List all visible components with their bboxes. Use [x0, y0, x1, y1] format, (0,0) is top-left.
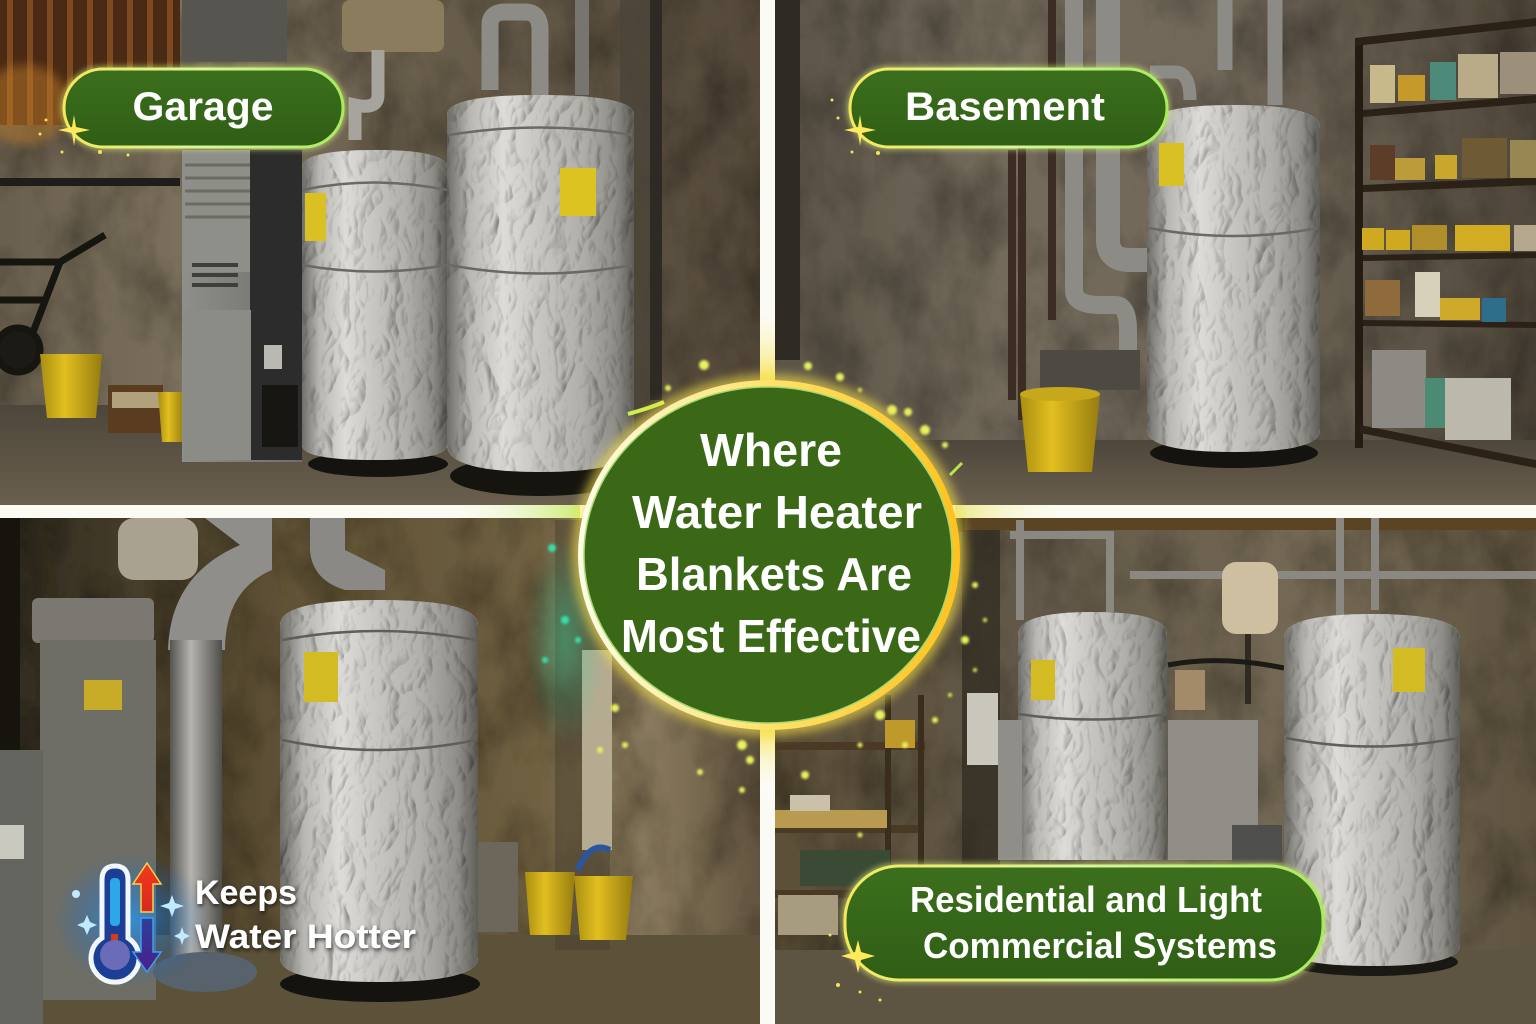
stroller [0, 235, 105, 372]
badge title: Most Effective [621, 610, 921, 662]
callout: keeps water hotter [52, 852, 416, 988]
label: Basement [830, 66, 1170, 155]
panel: commercial room photo [775, 518, 1536, 1024]
foil water heater [1147, 105, 1320, 468]
sparkles [72, 890, 190, 945]
badge title: Where [700, 424, 842, 476]
label: Residential and Light Commercial Systems: Residential and Light [910, 879, 1262, 920]
commercial room floor [775, 950, 1536, 1024]
badge disc [584, 387, 952, 723]
utility room floor [0, 935, 760, 1024]
basement wall [775, 0, 1536, 450]
gray box [478, 842, 518, 932]
label: Residential and Light Commercial Systems [828, 863, 1326, 1002]
large foil water heater [447, 95, 634, 496]
small foil water heater [302, 150, 448, 477]
garage floor [0, 405, 648, 505]
expansion tank [1222, 562, 1278, 704]
right foil water heater [1284, 614, 1460, 976]
silver pipes [1074, 0, 1275, 372]
keeps water hotter text [195, 874, 416, 956]
yellow buckets [525, 848, 633, 940]
furnace unit [182, 150, 302, 462]
storage shelf [1355, 18, 1536, 468]
wall control box [967, 693, 998, 765]
keeps water hotter text: Water Hotter [195, 918, 416, 956]
center badge [525, 360, 987, 838]
flue duct [168, 518, 385, 965]
badge title: Blankets Are [636, 548, 912, 600]
fittings near bucket [1040, 350, 1140, 390]
label: Garage [38, 66, 346, 156]
panel: utility room photo [0, 518, 760, 1024]
storage shelf [775, 695, 925, 945]
basement floor [914, 440, 1536, 505]
gray appliance [1168, 670, 1282, 863]
badge title: Water Heater [632, 486, 922, 538]
keeps water hotter text: Keeps [195, 874, 297, 912]
left foil water heater [998, 612, 1167, 860]
utility room wall [0, 518, 760, 948]
yellow bucket [1020, 387, 1100, 472]
badge sparkles [525, 360, 987, 838]
badge title [621, 424, 922, 662]
yellow bucket [40, 354, 102, 418]
commercial room wall [775, 518, 1536, 963]
base pan [153, 952, 257, 992]
panel: basement photo [775, 0, 1536, 505]
gas furnace [0, 598, 156, 1024]
glowing divider accents [430, 300, 1085, 795]
icon: thermometer [91, 866, 139, 982]
foil water heater [280, 600, 480, 1002]
label: Residential and Light Commercial Systems: Commercial Systems [923, 925, 1277, 966]
icon: up and down arrows [133, 863, 161, 972]
label: Garage: Garage [132, 85, 274, 129]
storage bins [108, 385, 184, 442]
panel: garage photo [0, 0, 760, 505]
label: Basement: Basement [905, 85, 1105, 129]
garage wall [0, 0, 760, 420]
badge ring [578, 380, 960, 730]
